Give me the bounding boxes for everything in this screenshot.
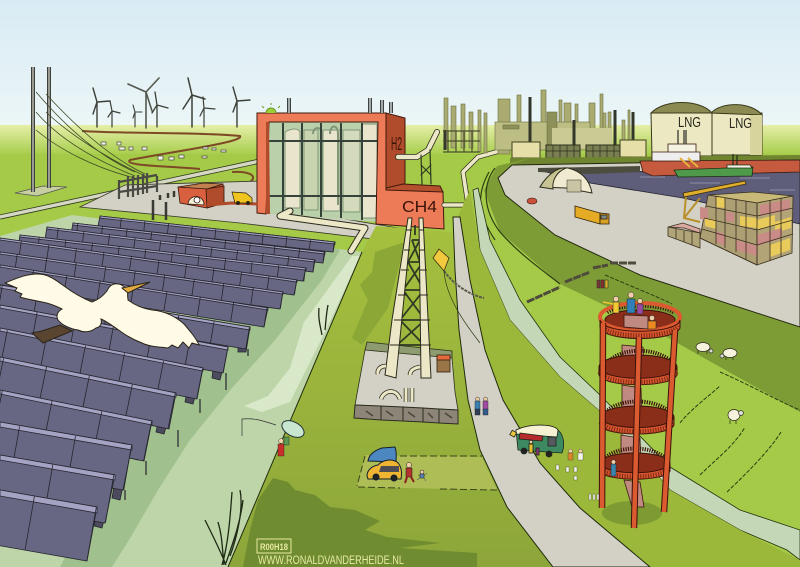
solar row 15: [98, 216, 335, 252]
dike lines: [481, 168, 560, 284]
food truck: [510, 425, 564, 457]
hydrogen outlet pipe: [398, 132, 437, 157]
fisherman with umbrella: [242, 417, 307, 456]
LNG tank 1: [651, 102, 712, 156]
gas pipe left: [385, 218, 412, 378]
refinery skyline: [443, 90, 646, 158]
level 4 platform: [600, 448, 670, 479]
yellow delivery van: [232, 192, 252, 205]
top platform: [600, 303, 680, 338]
stack right face: [757, 196, 793, 265]
CH4 block top: [386, 184, 443, 192]
container grid lines: [700, 196, 793, 265]
kite string and tail: [444, 271, 484, 298]
picnic patch: [357, 455, 497, 490]
level 3 platform: [600, 402, 674, 434]
sky: [0, 0, 800, 126]
yellow car: [367, 460, 402, 479]
umbrella: [279, 417, 307, 441]
plant side wall: [386, 113, 405, 190]
tanker hull: [640, 160, 800, 176]
power cables: [36, 92, 145, 178]
pipe trusses: [421, 150, 431, 184]
base front blocks: [354, 405, 458, 424]
refinery cream buildings: [512, 140, 646, 158]
gas pipe right: [419, 218, 431, 378]
solar row 14: [71, 223, 325, 263]
solar row 13: [45, 227, 315, 272]
green cargo boat: [674, 154, 753, 177]
distant fields: [0, 125, 800, 155]
solar row 9: [0, 265, 268, 327]
heron beak: [122, 282, 150, 293]
red-orange power-to-gas plant: H2: [391, 134, 402, 154]
coloured containers: [700, 197, 791, 257]
blue car: [368, 447, 396, 462]
dock strip: [510, 155, 800, 166]
solar row 2: [0, 455, 115, 528]
equipment yard on pad: [119, 173, 258, 220]
car wheels: [373, 474, 379, 480]
grazing cows: [101, 142, 226, 160]
bank edge: [228, 252, 362, 567]
plant window bars: [269, 123, 377, 220]
designer signature: [257, 539, 291, 553]
grass shadow: [243, 478, 477, 567]
people on tower top: [597, 280, 656, 476]
solar row 5: [0, 357, 176, 434]
solar row 10: [0, 252, 283, 309]
solar row 1: [0, 490, 97, 561]
tower ground shadow: [602, 501, 662, 525]
stack top: [708, 192, 793, 203]
harbour basin: [538, 170, 800, 224]
heron legs: [32, 325, 72, 343]
power pylons with cables: [15, 67, 145, 196]
refinery dark units: [546, 145, 620, 158]
tanker bow superstructure: [652, 152, 700, 161]
base back wall: [365, 342, 452, 362]
plant orange frame: [257, 113, 444, 229]
equipment pad: [80, 181, 398, 241]
small red hut: [437, 355, 450, 372]
roof vents: [289, 98, 391, 113]
tanker bridge: [668, 144, 696, 154]
solar row 11: [0, 238, 297, 295]
panel shadow on water: [60, 240, 340, 567]
solar row 4: [0, 390, 152, 461]
transformer posts: [153, 191, 174, 220]
loading arms: [680, 158, 698, 167]
red car on quay: [527, 198, 537, 204]
tower stair top: [624, 315, 648, 329]
fishing rod: [242, 419, 276, 436]
red tanker: [640, 130, 800, 176]
pylon base: [15, 186, 67, 196]
dike grass band: [484, 158, 800, 412]
quay wall: [538, 166, 640, 174]
roof indicator light: [262, 103, 280, 113]
solar row 12: [18, 235, 306, 281]
tower-side canal: [473, 188, 800, 560]
fisherman: [278, 437, 289, 456]
solar row 8: [0, 285, 250, 352]
upper grass shadow: [352, 242, 405, 345]
LNG tank 2: [711, 105, 762, 155]
base surface: [355, 350, 458, 410]
car windows: [379, 466, 399, 472]
walking road: [453, 217, 650, 567]
field road: [0, 161, 260, 217]
tower stair core: [621, 313, 648, 507]
main ground: [0, 154, 800, 567]
kite: [433, 249, 484, 343]
right bank grass: [456, 190, 800, 567]
yellow truck: [575, 206, 609, 224]
storage hangar: [540, 168, 592, 193]
walkers on road: [475, 397, 488, 415]
solar row 6: [0, 328, 203, 404]
panel legs: [125, 349, 248, 500]
dark refinery stacks: [445, 97, 633, 152]
surface valves: [378, 366, 420, 402]
pipe from plant to pad: [280, 211, 365, 251]
CH4 label: CH4: [402, 199, 437, 216]
container crane: [683, 181, 746, 222]
tanker funnels: [678, 130, 686, 144]
heron in flight: [5, 274, 199, 348]
small substation building: [178, 183, 224, 208]
plant window backdrop: [268, 122, 378, 222]
panel field background / canal: [0, 215, 362, 567]
level 2 platform: [599, 351, 677, 385]
LNG label 1: LNG: [678, 114, 701, 131]
base cross marks: [366, 411, 452, 418]
central grass: [228, 226, 553, 567]
refinery columns: [444, 90, 630, 155]
solar panel field: [0, 216, 335, 561]
pipe collar bands: [390, 230, 431, 345]
solar row 7: [0, 305, 228, 380]
concrete gas station base: [354, 218, 458, 424]
methane outlet pipe: [444, 148, 510, 205]
refinery pipe rack: [443, 131, 480, 152]
water highlights: [640, 177, 795, 190]
plant inner tanks: [285, 124, 377, 218]
frame inner shadow: [266, 122, 270, 214]
stack left face: [700, 195, 757, 265]
pylon masts: [33, 67, 49, 192]
substation feed line: [207, 203, 258, 205]
quay: [498, 160, 800, 327]
light water streak: [244, 256, 360, 412]
low container stack: [668, 223, 700, 248]
tower legs: [602, 323, 675, 528]
LNG label 2: LNG: [729, 115, 752, 132]
solar row 3: [0, 422, 132, 500]
designer signature: R00H18: [260, 542, 288, 552]
fence posts: [119, 173, 157, 199]
reeds: [205, 305, 328, 565]
hydrogen and methane pipes: [280, 132, 510, 251]
sheep: [696, 342, 743, 424]
blue car on yellow car: [367, 447, 402, 481]
heron body and wings: [5, 274, 199, 348]
meandering brown ditch: [82, 131, 253, 189]
gas pipe truss: [395, 225, 425, 345]
dike fences: [527, 263, 636, 302]
red-orange power-to-gas plant: [257, 98, 444, 229]
red observation tower: [597, 280, 680, 528]
website credit: WWW.RONALDVANDERHEIDE.NL: [258, 555, 404, 567]
large container stack: [700, 192, 793, 265]
family figures: [405, 462, 427, 483]
wind turbines: [93, 78, 250, 128]
patch edges: [357, 456, 497, 490]
field dashes: [605, 275, 800, 492]
LNG storage tanks: [651, 102, 762, 156]
picnic crowd: [556, 449, 599, 500]
